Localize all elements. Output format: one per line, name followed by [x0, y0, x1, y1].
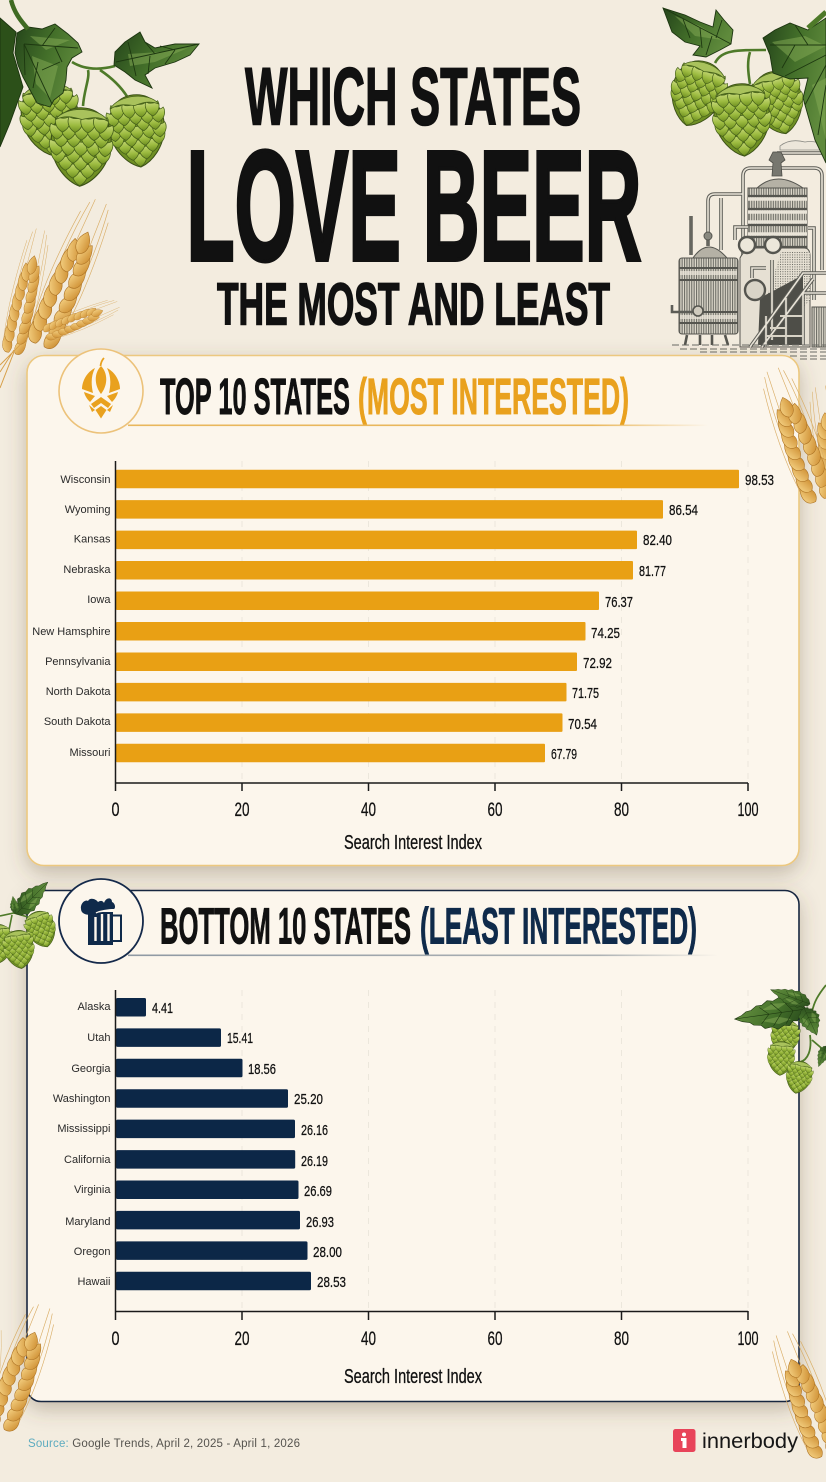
- tick labels: 40: [361, 1329, 376, 1350]
- state labels: Mississippi: [57, 1123, 110, 1135]
- illustration: hops top right: [661, 8, 826, 163]
- value labels: 74.25: [591, 625, 620, 642]
- logo mark: [673, 1429, 696, 1452]
- small leaf: [114, 32, 199, 88]
- tick labels: 80: [614, 1329, 629, 1350]
- large leaf: [15, 24, 82, 107]
- source note: Source: Google Trends, April 2, 2025 - April 1, 2026: [28, 1438, 300, 1450]
- value labels: 82.40: [643, 532, 672, 549]
- illustration: small hops right of bottom panel: [733, 982, 826, 1096]
- state labels: Wyoming: [65, 504, 110, 516]
- state labels: Utah: [87, 1032, 110, 1044]
- tick labels: [112, 1329, 758, 1350]
- illustration: brewery equipment: [672, 141, 826, 359]
- bars: [116, 470, 739, 762]
- state labels: Wisconsin: [60, 474, 110, 486]
- value labels: 86.54: [669, 502, 698, 519]
- value labels: 98.53: [745, 472, 774, 489]
- value labels: 4.41: [152, 1000, 173, 1017]
- state labels: [53, 1001, 111, 1288]
- icon badge: hop: [59, 349, 143, 433]
- value labels: 26.93: [306, 1214, 334, 1231]
- value labels: 18.56: [248, 1061, 276, 1078]
- title: [186, 52, 642, 338]
- value labels: 26.16: [301, 1122, 328, 1139]
- bar chart: least interested: [53, 990, 758, 1388]
- value labels: 67.79: [551, 746, 577, 763]
- logo: innerbody: [673, 1429, 799, 1453]
- illustration: wheat right of top panel: [753, 363, 826, 516]
- panel: top 10 states: [27, 349, 799, 866]
- value labels: 28.00: [313, 1244, 342, 1261]
- bar chart: most interested: [32, 461, 774, 854]
- state labels: North Dakota: [46, 686, 111, 698]
- tick labels: [112, 800, 758, 821]
- state labels: California: [64, 1154, 111, 1166]
- logo wordmark: innerbody: [702, 1430, 799, 1453]
- axes: [116, 990, 748, 1320]
- state labels: Maryland: [65, 1216, 110, 1228]
- state labels: Missouri: [70, 747, 110, 759]
- panel: top 10 states: TOP 10 STATES: [160, 368, 350, 425]
- bars: [116, 998, 311, 1290]
- tick labels: 100: [738, 1329, 758, 1350]
- illustration: wheat bottom right: [762, 1326, 826, 1465]
- value labels: 26.19: [301, 1153, 328, 1170]
- illustration: wheat bottom left: [0, 1299, 64, 1438]
- value labels: 26.69: [304, 1183, 332, 1200]
- state labels: Hawaii: [77, 1276, 110, 1288]
- axis title: Search Interest Index: [344, 832, 482, 854]
- value labels: 81.77: [639, 563, 666, 580]
- axis title: Search Interest Index: [344, 1366, 482, 1388]
- tick labels: 0: [112, 1329, 120, 1350]
- value labels: 72.92: [583, 655, 612, 672]
- state labels: [32, 474, 111, 759]
- state labels: Pennsylvania: [45, 656, 111, 668]
- state labels: Georgia: [71, 1063, 111, 1075]
- title line: the most and least: THE MOST AND LEAST: [217, 272, 610, 338]
- tick labels: 100: [738, 800, 758, 821]
- small leaf: [663, 8, 733, 57]
- state labels: Washington: [53, 1093, 110, 1105]
- state labels: Alaska: [77, 1001, 111, 1013]
- value labels: 15.41: [227, 1030, 253, 1047]
- large leaf: [763, 18, 826, 163]
- value labels: 71.75: [572, 685, 599, 702]
- state labels: Virginia: [74, 1184, 111, 1196]
- tick labels: 40: [361, 800, 376, 821]
- state labels: South Dakota: [44, 716, 111, 728]
- tick labels: 20: [234, 800, 250, 821]
- state labels: New Hamsphire: [32, 626, 110, 638]
- large dark leaf: [0, 18, 23, 147]
- value labels: [152, 1000, 346, 1291]
- panel: bottom 10 states: [27, 879, 799, 1402]
- illustration: wheat top left: [0, 194, 122, 388]
- value labels: 28.53: [317, 1274, 346, 1291]
- panel card: [27, 890, 799, 1402]
- tick labels: 0: [112, 800, 120, 821]
- value labels: [551, 472, 774, 763]
- tick labels: 20: [234, 1329, 250, 1350]
- tick labels: 60: [488, 1329, 502, 1350]
- axes: [116, 461, 748, 791]
- tick labels: 80: [614, 800, 629, 821]
- value labels: 76.37: [605, 594, 633, 611]
- state labels: Oregon: [74, 1246, 110, 1258]
- value labels: 25.20: [294, 1091, 323, 1108]
- tick labels: 60: [488, 800, 502, 821]
- value labels: 70.54: [568, 716, 597, 733]
- panel card: [27, 356, 799, 866]
- illustration: hops top left: [0, 0, 199, 187]
- state labels: Iowa: [87, 594, 111, 606]
- icon badge: beer mug: [59, 879, 143, 963]
- illustration: small hops left of bottom panel: [0, 874, 62, 971]
- state labels: Kansas: [74, 534, 111, 546]
- state labels: Nebraska: [63, 564, 111, 576]
- heading: bottom 10 states: BOTTOM 10 STATES: [160, 898, 411, 954]
